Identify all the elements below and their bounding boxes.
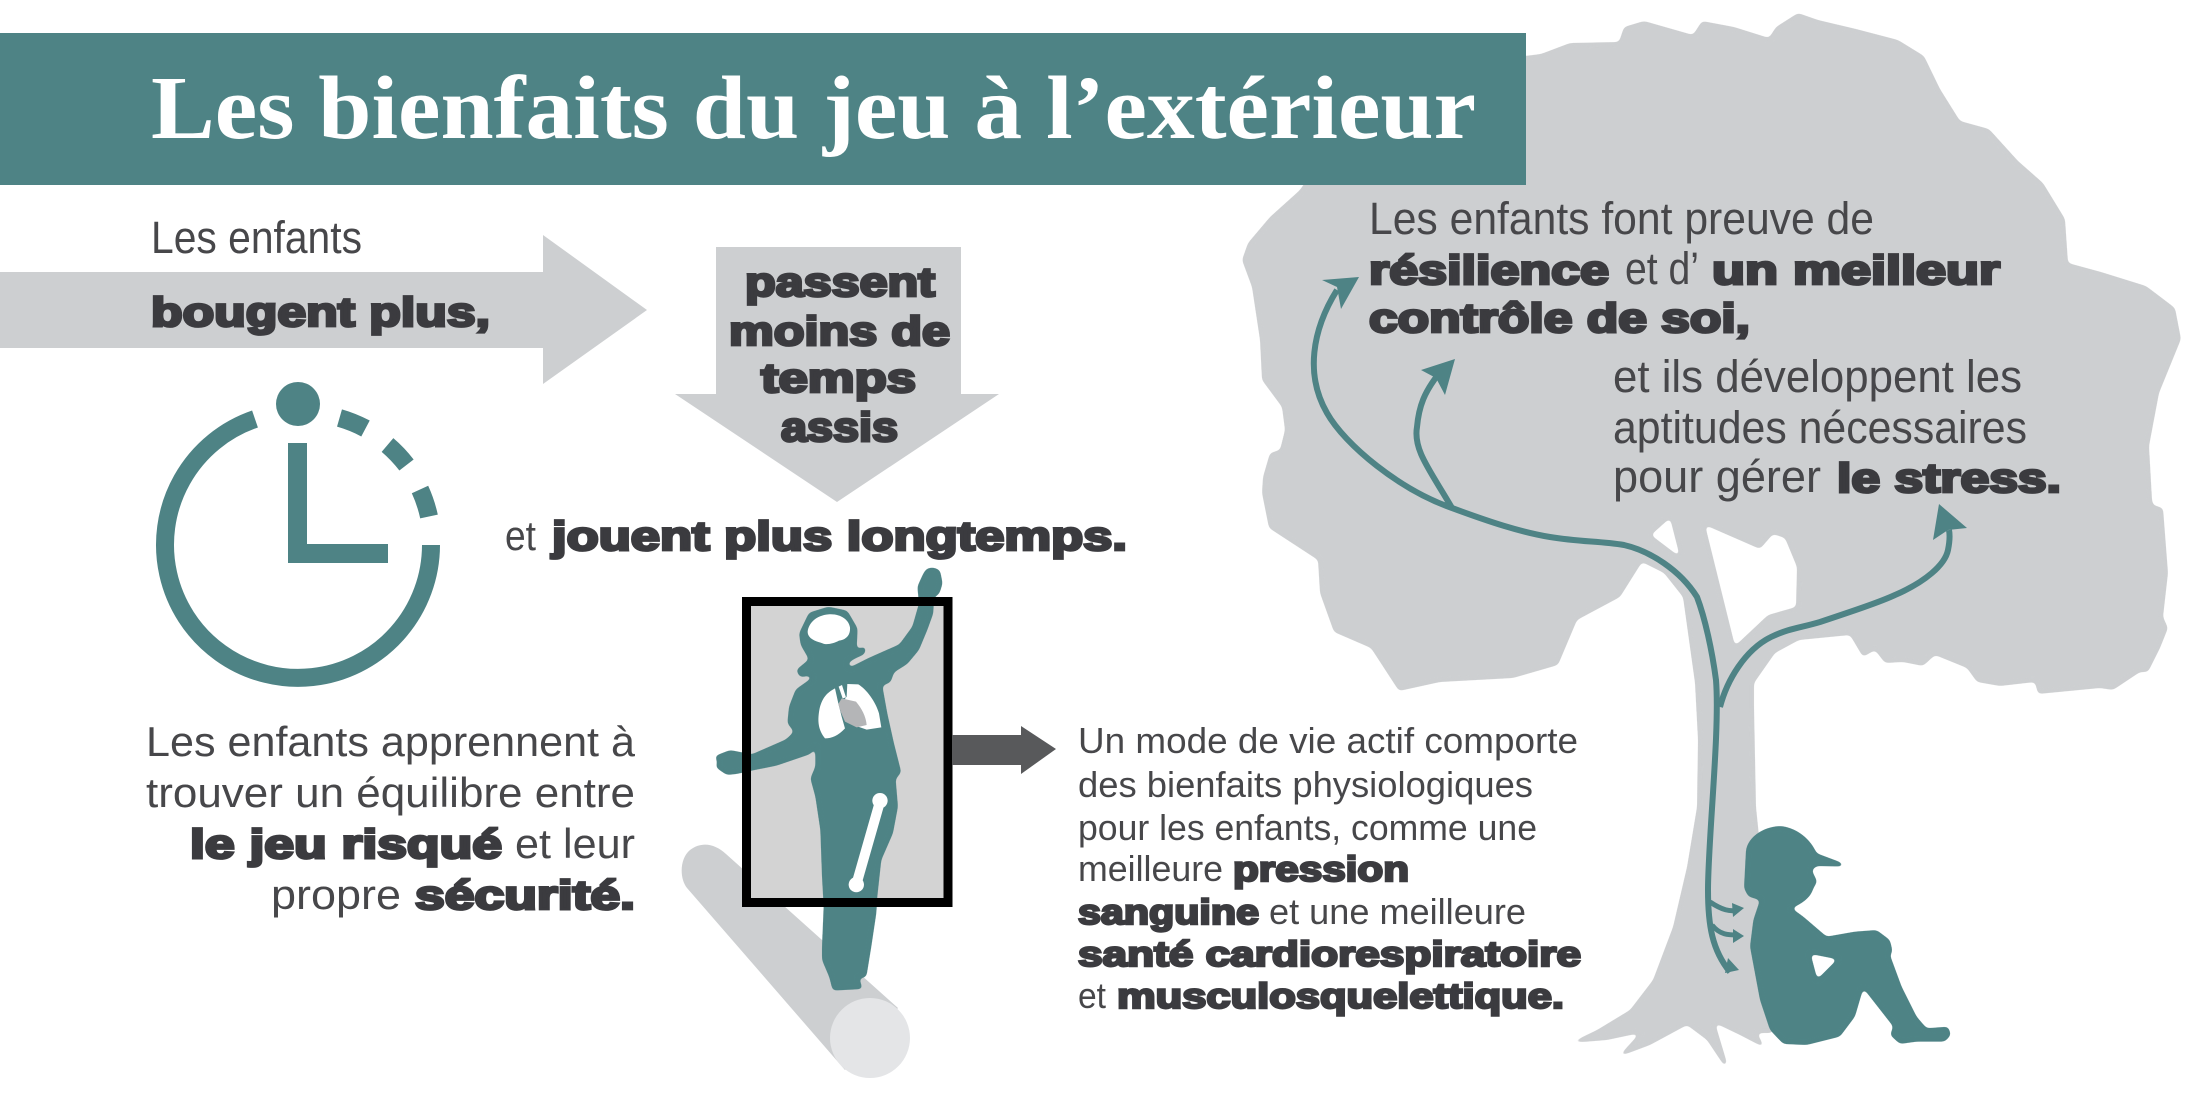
text: bougent plus: bougent plus, bbox=[151, 289, 490, 335]
lungs bbox=[818, 684, 881, 738]
text: coping with stress: et ils développent les bbox=[1613, 351, 2022, 402]
text: les enfants: Les enfants bbox=[151, 212, 362, 263]
icon: clock with dashed arc bbox=[165, 382, 431, 678]
text: resilience and self-control: contrôle de soi, bbox=[1369, 295, 1750, 341]
illustration: tree canopy, trunk and roots bbox=[1242, 13, 2181, 1067]
heart bbox=[838, 698, 867, 727]
text: risk and safety: et leur bbox=[515, 820, 635, 867]
log bbox=[682, 845, 910, 1078]
text: risk and safety: propre bbox=[271, 871, 401, 918]
text: physiological benefits: sanguine bbox=[1078, 893, 1259, 932]
title: Les bienfaits du jeu à l’extérieur bbox=[151, 59, 1476, 158]
text: coping with stress: aptitudes nécessaires bbox=[1613, 402, 2027, 453]
text: physiological benefits: pour les enfants, comme une bbox=[1078, 807, 1537, 848]
text: risk and safety: sécurité. bbox=[415, 872, 635, 918]
text: physiological benefits: et une meilleure bbox=[1269, 891, 1526, 932]
text: physiological benefits: musculosquelettique. bbox=[1117, 977, 1564, 1016]
arrow: to physiological benefits bbox=[952, 726, 1056, 774]
text: passent moins de temps assis: passent bbox=[745, 259, 935, 305]
text: passent moins de temps assis bbox=[729, 259, 950, 450]
text: physiological benefits: santé cardiorespiratoire bbox=[1078, 935, 1581, 974]
illustration: seated child bbox=[1744, 826, 1951, 1045]
text: resilience and self-control: et d’ bbox=[1625, 243, 1699, 294]
text: resilience and self-control bbox=[1369, 193, 2000, 341]
text: passent moins de temps assis: assis bbox=[781, 404, 898, 450]
text: resilience and self-control: Les enfants font preuve de bbox=[1369, 193, 1874, 244]
arrows: branching from child up the tree bbox=[1314, 277, 1967, 973]
arrow: to resilience bbox=[1314, 277, 1730, 972]
text: resilience and self-control: résilience bbox=[1369, 247, 1609, 293]
text: coping with stress: le stress. bbox=[1837, 455, 2061, 501]
text: physiological benefits: pression bbox=[1233, 850, 1409, 889]
text: coping with stress bbox=[1613, 351, 2061, 502]
text: coping with stress: pour gérer bbox=[1613, 451, 1821, 502]
text: et jouent plus longtemps: et bbox=[505, 512, 536, 559]
text: physiological benefits: et bbox=[1078, 975, 1106, 1016]
arrow: to self-control bbox=[1416, 359, 1455, 508]
text: risk and safety: Les enfants apprennent à bbox=[146, 718, 636, 765]
text: risk and safety: le jeu risqué bbox=[190, 821, 502, 867]
arrow: moving right bbox=[0, 235, 647, 384]
frame bbox=[746, 602, 948, 902]
text: physiological benefits: Un mode de vie actif comporte bbox=[1078, 720, 1578, 761]
text: risk and safety bbox=[146, 718, 636, 918]
text: passent moins de temps assis: temps bbox=[761, 355, 916, 401]
text: physiological benefits bbox=[1078, 720, 1581, 1016]
bone bbox=[849, 793, 888, 892]
arrow: sitting less, pointing down bbox=[675, 247, 999, 502]
text: resilience and self-control: un meilleur bbox=[1712, 247, 2000, 293]
illustration: child balancing on a log bbox=[682, 567, 1056, 1078]
text: risk and safety: trouver un équilibre entre bbox=[146, 769, 635, 816]
text: passent moins de temps assis: moins de bbox=[729, 308, 950, 354]
frame background bbox=[747, 602, 947, 902]
title banner bbox=[0, 33, 1526, 185]
text: et jouent plus longtemps: jouent plus longtemps. bbox=[551, 513, 1127, 559]
brain bbox=[808, 614, 850, 644]
text: physiological benefits: des bienfaits physiologiques bbox=[1078, 764, 1533, 805]
small arrows: toward seated child bbox=[1710, 902, 1744, 973]
child silhouette bbox=[715, 567, 943, 991]
arrow: to stress bbox=[1720, 504, 1967, 707]
text: physiological benefits: meilleure bbox=[1078, 848, 1223, 889]
